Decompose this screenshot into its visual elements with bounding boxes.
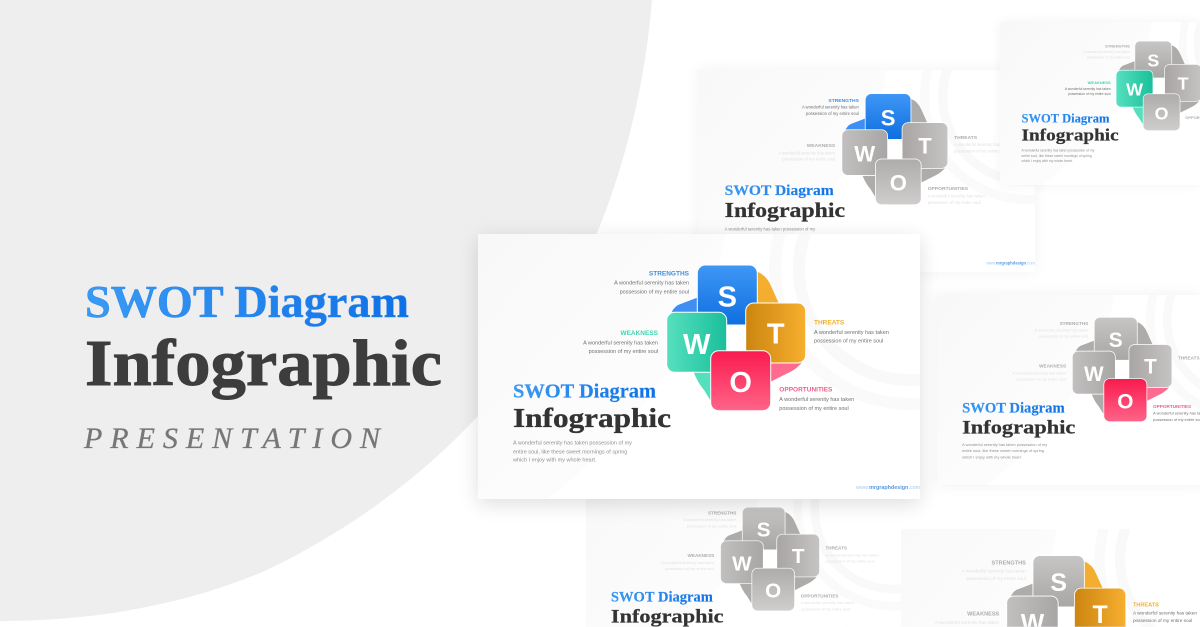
website: www.mrgraphdesign.com bbox=[986, 260, 1036, 265]
label: strengths: STRENGTHS bbox=[992, 561, 1026, 567]
label: weakness: WEAKNESS bbox=[1088, 80, 1111, 85]
slide paragraph: which I enjoy with my whole heart. bbox=[1022, 159, 1073, 163]
label: strengths bbox=[802, 98, 860, 116]
label: strengths: A wonderful serenity has taken bbox=[1084, 50, 1130, 54]
label: opportunities: OPPORTUNITIES bbox=[928, 186, 969, 192]
slide title: SWOT Diagram bbox=[725, 182, 834, 199]
label: weakness bbox=[1065, 80, 1111, 96]
slide: weakness highlighted, top right bbox=[1000, 41, 1200, 163]
label: weakness bbox=[778, 143, 836, 162]
label: threats: A wonderful serenity has taken bbox=[1133, 611, 1197, 616]
label: strengths bbox=[614, 271, 690, 295]
slide: threats highlighted, bottom right bbox=[935, 556, 1197, 627]
label: threats: possession of my entire soul bbox=[825, 558, 875, 563]
swot diagram: S bbox=[757, 519, 771, 542]
swot diagram bbox=[1072, 317, 1172, 422]
swot diagram: S bbox=[1050, 570, 1067, 597]
swot diagram: T bbox=[792, 545, 805, 568]
swot diagram bbox=[1116, 41, 1200, 131]
swot diagram bbox=[1007, 556, 1126, 627]
label: opportunities: OPPORTUNITIES bbox=[779, 387, 833, 394]
label: strengths bbox=[1035, 321, 1088, 339]
label: opportunities: A wonderful serenity has taken bbox=[928, 193, 985, 198]
label: threats: possession of my entire soul bbox=[1133, 618, 1192, 623]
swot diagram: W bbox=[683, 329, 711, 361]
label: strengths: STRENGTHS bbox=[828, 98, 860, 104]
slide title bbox=[725, 182, 845, 222]
slide: strengths highlighted, top centre bbox=[724, 94, 1035, 266]
swot diagram: S bbox=[1109, 329, 1123, 352]
slide title bbox=[1022, 112, 1119, 145]
label: threats: A wonderful serenity has taken bbox=[814, 330, 889, 336]
slide title: SWOT Diagram bbox=[1022, 112, 1110, 126]
label: weakness: possession of my entire soul bbox=[665, 566, 714, 571]
hero title: SWOT Diagram: SWOT Diagram bbox=[85, 277, 409, 327]
label: weakness: A wonderful serenity has taken bbox=[1065, 87, 1111, 91]
label: strengths bbox=[962, 561, 1026, 581]
slide title: Infographic bbox=[962, 417, 1076, 438]
label: threats: THREATS bbox=[1133, 602, 1159, 608]
slide paragraph: which I enjoy with my whole heart. bbox=[962, 454, 1022, 459]
slide paragraph: entire soul, like these sweet mornings of spring bbox=[962, 448, 1044, 453]
slide title: Infographic bbox=[611, 607, 724, 627]
label: strengths: possession of my entire soul bbox=[1087, 55, 1130, 59]
slide paragraph: entire soul, like these sweet mornings of spring bbox=[1022, 154, 1092, 158]
slide title: SWOT Diagram bbox=[513, 381, 656, 403]
swot diagram bbox=[720, 507, 820, 611]
label: opportunities bbox=[779, 387, 854, 412]
swot diagram: O bbox=[765, 580, 781, 603]
label: weakness bbox=[1012, 363, 1066, 381]
label: opportunities: possession of my entire soul bbox=[779, 406, 849, 412]
label: threats: possession of my entire soul bbox=[814, 338, 883, 344]
label: weakness: A wonderful serenity has taken bbox=[1012, 370, 1066, 375]
swot diagram: S bbox=[718, 282, 737, 314]
label: strengths: possession of my entire soul bbox=[966, 576, 1026, 581]
slide title bbox=[611, 590, 724, 627]
slide paragraph: A wonderful serenity has taken possession of my bbox=[725, 227, 816, 232]
label: weakness: WEAKNESS bbox=[967, 612, 1000, 618]
swot diagram: W bbox=[854, 141, 875, 166]
label: opportunities: OPPORTUNITIES bbox=[801, 593, 839, 598]
swot diagram: S bbox=[1147, 51, 1159, 71]
slide paragraph: entire soul, like these sweet mornings of spring bbox=[513, 449, 627, 455]
label: weakness: possession of my entire soul bbox=[589, 349, 658, 355]
label: opportunities: possession of my entire soul bbox=[801, 606, 850, 611]
label: opportunities bbox=[1153, 404, 1200, 422]
slide paragraph: A wonderful serenity has taken possession of my bbox=[513, 441, 632, 447]
label: threats: A wonderful serenity has taken bbox=[825, 552, 879, 557]
label: opportunities: possession of my entire soul bbox=[928, 200, 981, 205]
slide paragraph: which I enjoy with my whole heart. bbox=[512, 458, 597, 464]
label: strengths: STRENGTHS bbox=[708, 511, 736, 516]
label: weakness bbox=[661, 553, 714, 571]
label: strengths: possession of my entire soul bbox=[1039, 334, 1088, 339]
swot diagram: S bbox=[881, 105, 895, 130]
label: opportunities: A wonderful serenity has taken bbox=[801, 600, 854, 605]
slide title: SWOT Diagram bbox=[611, 590, 713, 606]
label: threats: THREATS bbox=[814, 319, 845, 326]
swot diagram bbox=[842, 94, 948, 205]
swot diagram: W bbox=[1126, 80, 1143, 100]
label: strengths: STRENGTHS bbox=[1060, 321, 1088, 326]
swot diagram bbox=[667, 265, 806, 411]
label: weakness: possession of my entire soul bbox=[782, 157, 835, 162]
label: threats: THREATS bbox=[1178, 356, 1200, 361]
swot diagram: T bbox=[767, 318, 785, 350]
label: strengths: A wonderful serenity has taken bbox=[802, 105, 860, 110]
label: strengths: A wonderful serenity has taken bbox=[962, 568, 1026, 573]
swot diagram: T bbox=[918, 133, 932, 158]
slide title: Infographic bbox=[1022, 126, 1119, 145]
label: weakness bbox=[583, 330, 659, 355]
label: threats: THREATS bbox=[825, 545, 847, 550]
label: threats bbox=[825, 545, 879, 563]
main slide: full colour bbox=[472, 232, 926, 510]
label: opportunities bbox=[928, 186, 985, 205]
swot diagram: O bbox=[1117, 390, 1133, 413]
label: strengths: A wonderful serenity has taken bbox=[683, 517, 736, 522]
label: weakness: A wonderful serenity has taken bbox=[583, 341, 658, 347]
slide paragraph: A wonderful serenity has taken possession of my bbox=[1022, 149, 1095, 153]
slide title: Infographic bbox=[513, 403, 671, 433]
label: strengths: STRENGTHS bbox=[1105, 44, 1130, 49]
label: weakness: WEAKNESS bbox=[688, 553, 714, 558]
label: weakness: WEAKNESS bbox=[807, 143, 836, 149]
slide title: Infographic bbox=[725, 200, 845, 222]
slide title bbox=[962, 400, 1076, 438]
slide paragraph bbox=[512, 441, 632, 464]
label: threats bbox=[1133, 602, 1197, 623]
label: strengths: possession of my entire soul bbox=[620, 289, 689, 295]
slide: opportunities highlighted, right bbox=[962, 318, 1200, 460]
label: weakness: A wonderful serenity has taken bbox=[935, 620, 1000, 625]
label: strengths: possession of my entire soul bbox=[806, 111, 859, 116]
slide paragraph bbox=[962, 442, 1047, 459]
label: threats: A wonderful serenity has taken bbox=[954, 142, 1012, 147]
label: strengths: A wonderful serenity has taken bbox=[614, 281, 689, 287]
background quarter ellipse bbox=[0, 0, 652, 621]
hero title: Infographic: Infographic bbox=[85, 327, 442, 400]
hero subtitle: PRESENTATION: PRESENTATION bbox=[83, 422, 382, 455]
label: threats: THREATS bbox=[954, 135, 978, 141]
label: weakness: WEAKNESS bbox=[620, 330, 659, 337]
label: weakness: possession of my entire soul bbox=[1016, 376, 1066, 381]
label: threats: possession of my entire soul bbox=[954, 149, 1007, 154]
swot diagram: T bbox=[1178, 73, 1189, 93]
swot diagram: O bbox=[729, 367, 752, 399]
label: strengths bbox=[683, 511, 737, 528]
swot diagram: T bbox=[1144, 356, 1157, 379]
label: threats bbox=[814, 319, 889, 344]
website: www.mrgraphdesign.com bbox=[855, 485, 921, 491]
label: weakness: A wonderful serenity has taken bbox=[778, 150, 836, 155]
label: weakness: possession of my entire soul bbox=[1068, 92, 1111, 96]
label: opportunities bbox=[801, 593, 854, 611]
swot diagram: W bbox=[1084, 363, 1104, 386]
label: opportunities: A wonderful serenity has taken bbox=[779, 397, 854, 403]
label: strengths: A wonderful serenity has taken bbox=[1035, 327, 1088, 332]
swot diagram: W bbox=[732, 552, 752, 575]
label: strengths bbox=[1084, 44, 1130, 59]
swot diagram: O bbox=[890, 171, 907, 196]
slide title: SWOT Diagram bbox=[962, 400, 1065, 416]
label: threats bbox=[954, 135, 1012, 154]
slide paragraph: A wonderful serenity has taken possession of my bbox=[962, 442, 1047, 447]
label: strengths: STRENGTHS bbox=[649, 271, 690, 278]
slide: all grey, bottom centre bbox=[611, 508, 878, 627]
swot diagram: O bbox=[1155, 103, 1169, 123]
slide paragraph bbox=[1022, 149, 1095, 163]
label: weakness: WEAKNESS bbox=[1039, 363, 1066, 368]
label: weakness bbox=[935, 612, 1000, 625]
slide title bbox=[513, 381, 671, 433]
label: opportunities: OPPORTUNITIES bbox=[1153, 404, 1191, 409]
label: weakness: A wonderful serenity has taken bbox=[661, 560, 714, 565]
label: strengths: possession of my entire soul bbox=[687, 523, 737, 528]
